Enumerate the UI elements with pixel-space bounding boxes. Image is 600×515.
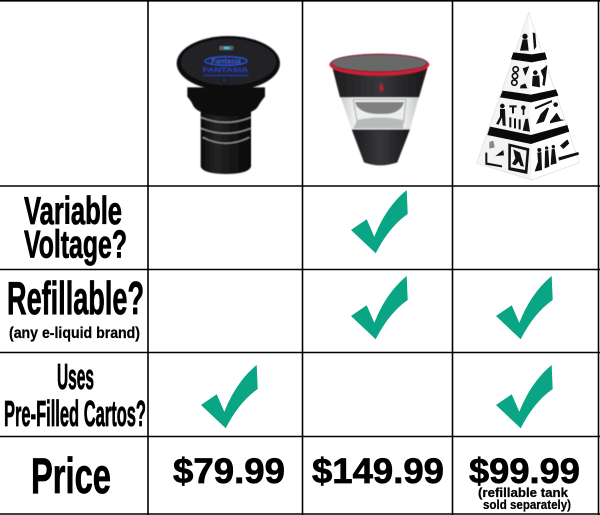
price note: product 3: sold separately)	[483, 498, 571, 512]
row label: Variable Voltage?	[24, 190, 127, 266]
product: round black device: Fantasia	[211, 57, 241, 66]
price: product 3: $99.99	[469, 452, 580, 491]
price note: product 3	[478, 486, 571, 512]
row label: Refillable?	[7, 272, 144, 342]
row label: Variable Voltage?: Variable	[24, 190, 122, 233]
row label: Uses Pre-Filled Cartos?	[4, 356, 146, 434]
product: round black device: FANTASIA	[203, 67, 249, 74]
row label: Price: Price	[31, 448, 111, 504]
row label: Refillable?: (any e-liquid brand)	[9, 325, 140, 342]
price note: product 3: (refillable tank	[478, 486, 568, 500]
check: pre-filled cartos, product 3	[496, 365, 553, 428]
price: product 2: $149.99	[312, 452, 444, 491]
row label: Variable Voltage?: Voltage?	[24, 224, 127, 266]
check: variable voltage, product 2	[351, 190, 408, 253]
check: refillable, product 2	[351, 276, 408, 339]
comparison table: Pre-Filled Cartos?	[4, 393, 146, 434]
product: cone device with red rim	[329, 54, 429, 165]
product: round black device	[177, 36, 280, 174]
row label: Refillable?: Refillable?	[7, 272, 144, 324]
row label: Uses Pre-Filled Cartos?: Uses	[57, 356, 94, 397]
price: product 1: $79.99	[173, 452, 285, 491]
product: white pyramid with hieroglyphs	[477, 13, 579, 180]
check: refillable, product 3	[496, 276, 553, 339]
check: pre-filled cartos, product 1	[201, 365, 258, 428]
